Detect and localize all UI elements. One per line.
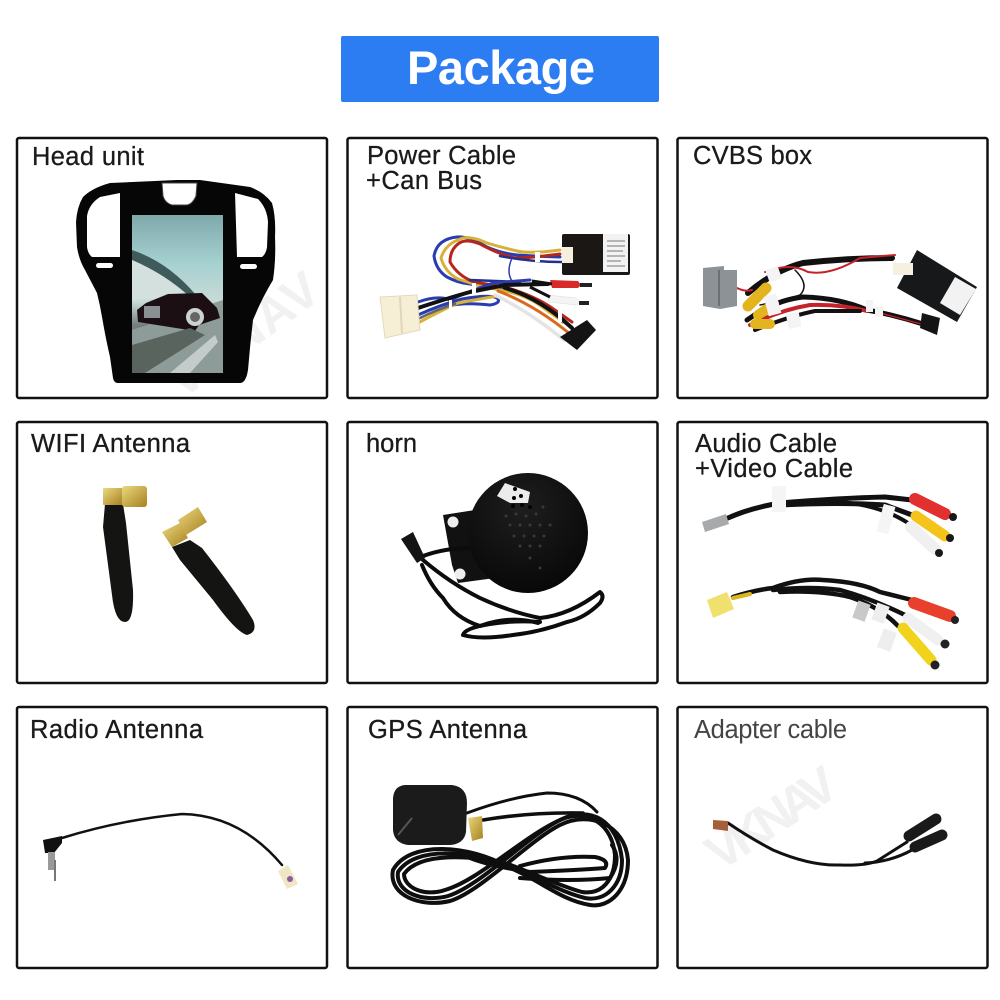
icon: small connector (920, 313, 940, 335)
title banner: Package (407, 41, 595, 94)
icon: gray connector (703, 266, 737, 309)
watermark: VKNAV (156, 260, 331, 409)
icon: adapter cable (713, 819, 942, 865)
icon: control box (893, 250, 977, 322)
icon: cvbs harness (703, 250, 977, 335)
panel: adapter cable (678, 707, 988, 968)
heading: head unit: Head unit (32, 143, 144, 171)
icon: left antenna (103, 486, 147, 622)
heading: adapter cable: Adapter cable (694, 716, 847, 744)
heading: audio cable: Audio Cable (695, 430, 837, 458)
heading: gps antenna: GPS Antenna (368, 716, 528, 744)
heading: wifi antenna: WIFI Antenna (31, 430, 191, 458)
heading: cvbs box: CVBS box (693, 142, 812, 170)
panel: cvbs box (678, 138, 988, 398)
panel: gps antenna (348, 707, 658, 968)
panel: wifi antenna (17, 422, 327, 683)
icon: rca plugs (530, 280, 592, 305)
panel: radio antenna (17, 707, 327, 968)
panel: audio video cable (678, 422, 988, 683)
watermark: VKNAV (695, 755, 848, 881)
icon: white connector (380, 295, 420, 338)
icon: radio antenna cable (43, 814, 298, 889)
icon: power harness (380, 234, 630, 350)
heading: power cable: Power Cable (367, 142, 516, 170)
heading: radio antenna: Radio Antenna (30, 716, 204, 744)
heading: video cable: +Video Cable (695, 455, 853, 483)
panel: horn (348, 422, 658, 683)
heading: can bus: +Can Bus (366, 167, 482, 195)
icon: yellow rca plugs (748, 288, 774, 324)
icon: can box (562, 234, 630, 275)
title banner (341, 36, 659, 102)
labels (764, 266, 883, 329)
icon: right antenna (162, 507, 255, 635)
icon: black connector (560, 320, 596, 350)
icon: audio cable (702, 486, 957, 557)
icon: gps antenna (392, 785, 628, 905)
cable ties (449, 252, 562, 322)
heading: horn: horn (366, 430, 417, 458)
screen (132, 215, 223, 373)
panel: head unit (17, 138, 331, 409)
panel: power cable (348, 138, 658, 398)
icon: speaker (401, 473, 602, 638)
bracket (443, 510, 495, 583)
icon: head unit (76, 180, 275, 383)
icon: video cable (707, 580, 959, 670)
